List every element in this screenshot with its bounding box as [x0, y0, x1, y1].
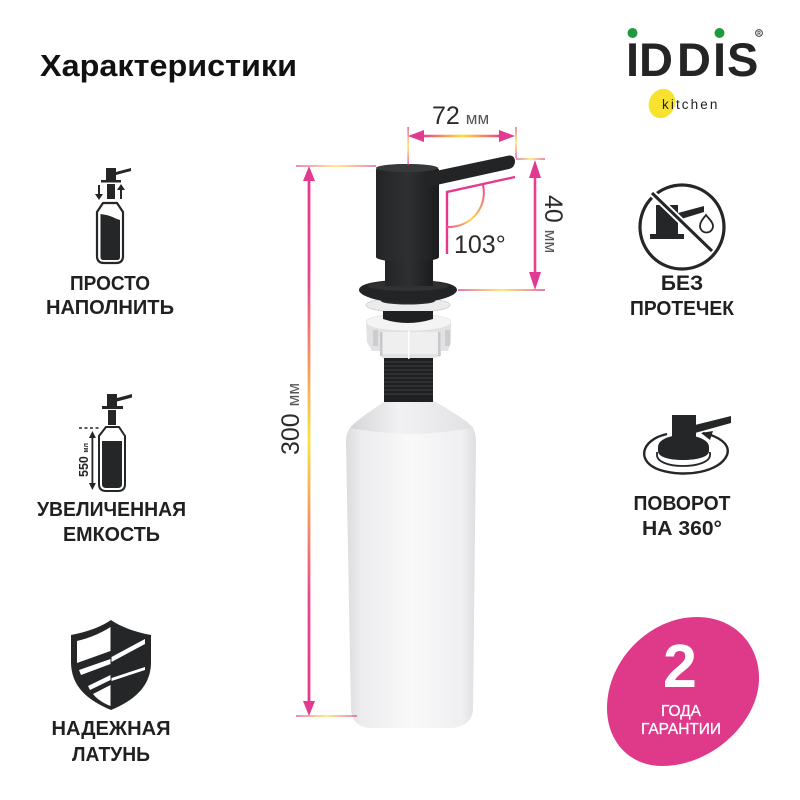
icon: increased capacity bottle: 550 мл	[77, 443, 91, 477]
label: easy refill	[46, 273, 174, 319]
logo: IDDIS kitchen	[626, 28, 762, 123]
icon: 360 rotation	[644, 415, 731, 474]
label: 360 rotation: НА 360°	[642, 518, 722, 540]
bottle	[346, 399, 476, 728]
title: Характеристики	[40, 48, 297, 83]
product: soap dispenser	[346, 155, 515, 728]
dimension: 72 mm: 72 мм	[432, 102, 489, 130]
dimension: 103 degree angle: 103°	[454, 231, 506, 259]
warranty badge	[607, 617, 759, 766]
warranty badge: ГАРАНТИИ	[641, 721, 721, 738]
icon: increased capacity bottle	[77, 394, 132, 491]
logo: IDDIS kitchen: kitchen	[662, 97, 719, 112]
warranty badge: ГОДА	[661, 703, 702, 720]
plastic nut	[366, 314, 451, 358]
label: easy refill: ПРОСТО	[70, 273, 150, 295]
threaded stem	[384, 356, 433, 402]
spout	[425, 155, 515, 186]
label: 360 rotation	[634, 493, 730, 540]
icon: brass shield	[71, 620, 151, 710]
logo: IDDIS kitchen: IDDIS	[626, 33, 758, 86]
flange	[359, 280, 457, 303]
label: reliable brass	[52, 718, 170, 766]
label: increased capacity: УВЕЛИЧЕННАЯ	[37, 499, 186, 521]
neck	[385, 258, 433, 286]
dimension: 40 mm	[458, 158, 567, 291]
icon: easy refill bottle	[95, 168, 131, 263]
icon: no leaks	[640, 185, 724, 269]
label: no leaks: ПРОТЕЧЕК	[630, 298, 735, 320]
dimension: 300 mm: 300 мм	[277, 383, 305, 455]
dimension: 103 degree angle	[447, 177, 515, 259]
dimension: 40 mm: 40 мм	[539, 195, 567, 253]
warranty badge: 2	[663, 632, 697, 700]
label: easy refill: НАПОЛНИТЬ	[46, 297, 174, 319]
dimension: 72 mm	[408, 102, 517, 165]
label: reliable brass: ЛАТУНЬ	[72, 744, 150, 766]
head	[376, 164, 439, 262]
label: increased capacity	[37, 499, 186, 546]
logo: IDDIS kitchen: R	[757, 31, 761, 37]
label: 360 rotation: ПОВОРОТ	[634, 493, 730, 515]
label: increased capacity: ЕМКОСТЬ	[63, 524, 160, 546]
dimension: 300 mm	[277, 165, 376, 717]
white washer	[366, 298, 450, 312]
label: no leaks: БЕЗ	[661, 272, 703, 295]
label: no leaks	[630, 272, 735, 320]
label: reliable brass: НАДЕЖНАЯ	[52, 718, 170, 740]
